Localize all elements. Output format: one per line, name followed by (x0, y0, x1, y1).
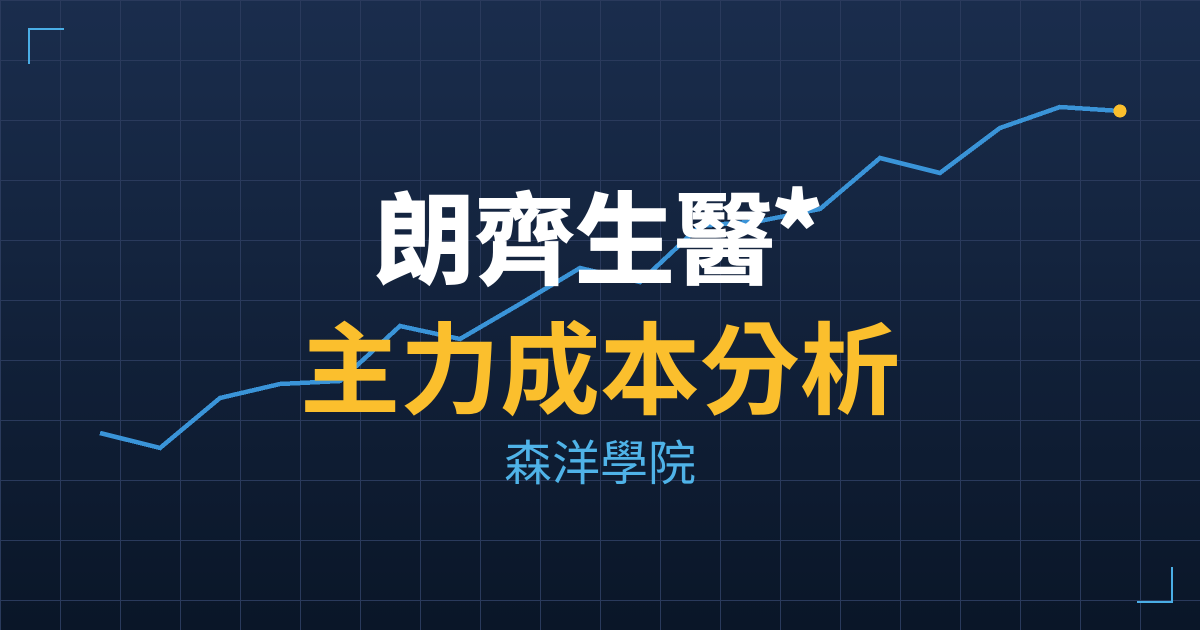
corner bracket: bottom right (1137, 567, 1173, 603)
chart end marker (1114, 104, 1126, 118)
corner bracket: top left (28, 28, 64, 64)
title: * (770, 150, 824, 303)
title: 朗齊生醫 (375, 160, 775, 305)
subtitle: 主力成本分析 (300, 290, 900, 435)
brand name: 森洋學院 (504, 424, 696, 494)
